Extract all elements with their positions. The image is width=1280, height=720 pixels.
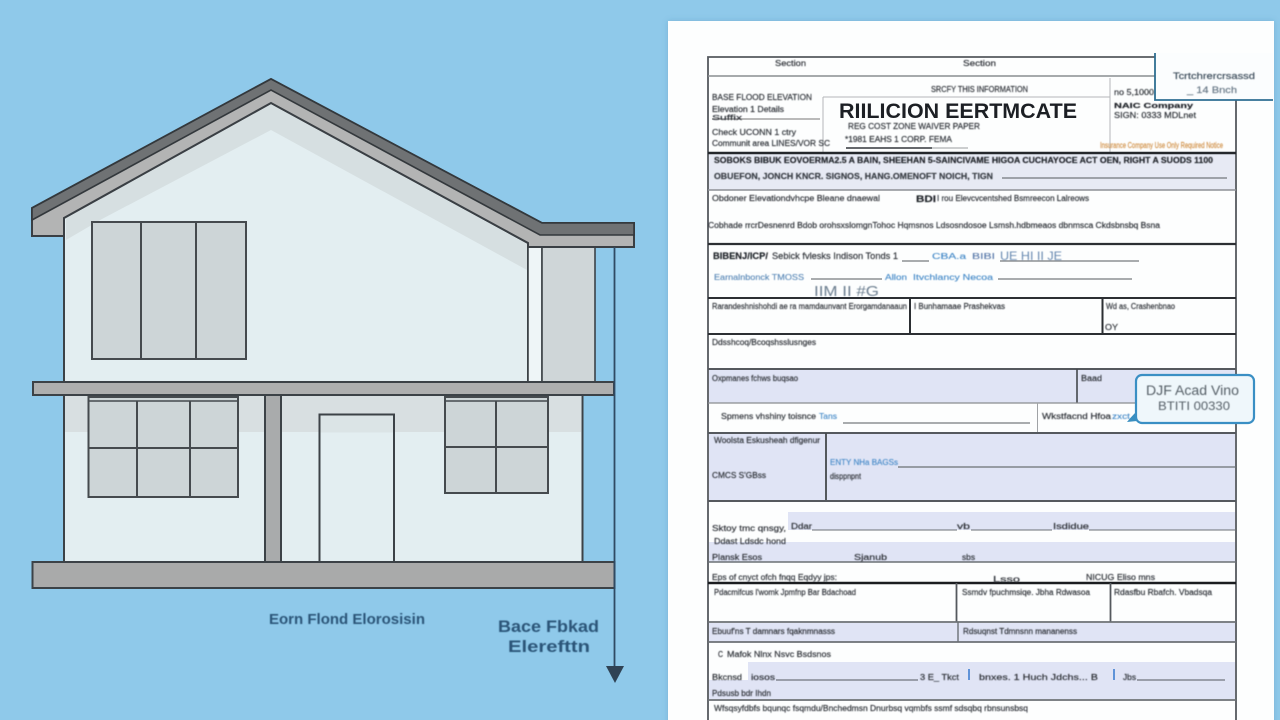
form header text: SRCFY THIS INFORMATION	[931, 85, 1028, 94]
section E text: 3 E_ Tkct	[920, 673, 960, 682]
section D text: sbs	[962, 553, 975, 562]
wall roof shadow	[66, 104, 527, 270]
side column	[528, 246, 595, 382]
section C text: Oxpmanes fchws buqsao	[712, 374, 799, 383]
callout: top right	[1155, 53, 1273, 100]
form header right text	[1100, 103, 1223, 150]
form title subtext: REG COST ZONE WAIVER PAPER	[848, 122, 980, 131]
section C text: Wkstfacnd Hfoa	[1042, 412, 1112, 421]
foundation	[32, 562, 614, 588]
section A text: BDI	[916, 194, 936, 204]
section D text: Isdidue	[1053, 522, 1090, 531]
form header right text: NAIC Company	[1114, 103, 1193, 110]
section C text: ENTY NHa BAGSs	[830, 457, 898, 467]
section D text: Sktoy tmc qnsgy,	[712, 524, 786, 533]
section E text: Jbs	[1123, 673, 1136, 682]
section E text: Ssmdv fpuchmsiqe. Jbha Rdwasoa	[962, 588, 1091, 597]
illustration: house	[32, 79, 634, 588]
section D text: Plansk Esos	[712, 553, 762, 562]
form header right text: SIGN: 0333 MDLnet	[1114, 111, 1197, 120]
blue field ticks	[969, 669, 1114, 680]
section C text: I Bunhamaae Prashekvas	[914, 302, 1005, 311]
upper wall	[64, 103, 528, 382]
section E text	[712, 588, 1213, 713]
section B text: Sebick fvlesks Indison Tonds 1	[772, 251, 898, 261]
form header right text: Insurance Company Use Only Required Notice	[1100, 141, 1223, 150]
callout: top right: _ 14 Bnch	[1186, 85, 1237, 95]
section A text: I rou Elevcvcentshed Bsmreecon Lalreows	[937, 194, 1089, 203]
panel: form	[708, 57, 1236, 720]
section D text: Lsso	[993, 575, 1021, 584]
form header text: Communit area LINES/VOR SC	[712, 139, 830, 148]
section D text: Ddar	[791, 522, 812, 531]
arrow: base flood elevation	[606, 247, 624, 683]
door	[320, 414, 394, 562]
form title subtext	[845, 122, 980, 144]
form header text: BASE FLOOD ELEVATION	[712, 93, 812, 102]
section A text	[708, 156, 1214, 230]
form title: RIILICION EERTMCATE	[839, 99, 1077, 123]
section E text: Bkcnsd	[712, 673, 742, 682]
section D text: Ddast Ldsdc hond	[714, 537, 786, 546]
section E text: iosos	[751, 673, 775, 682]
form header text: Section	[775, 59, 806, 68]
lower wall	[64, 395, 582, 562]
section A text: Cobhade rrcrDesnenrd Bdob orohsxslomgnTohoc Hqmsnos Ldsosndosoe Lsmsh.hdbmeaos dbnmsca Ckdsbnsbq Bsna	[708, 221, 1161, 230]
roof	[32, 79, 634, 247]
form header text: no 5,1000	[1114, 88, 1155, 97]
callout: top right: Tcrtchrercrsassd	[1173, 71, 1255, 81]
right lower window	[445, 397, 548, 493]
section C text: Spmens vhshiny toisnce	[721, 412, 817, 421]
section B text: Earnalnbonck TMOSS	[714, 272, 804, 282]
section C text: zxct	[1112, 411, 1131, 421]
section A text: SOBOKS BIBUK EOVOERMA2.5 A BAIN, SHEEHAN 5-SAINCIVAME HIGOA CUCHAYOCE ACT OEN, RIGHT A SUODS 1100	[714, 156, 1214, 165]
section A text: Obdoner Elevationdvhcpe Bleane dnaewal	[712, 194, 880, 203]
section B text: BIBENJ/ICP/	[713, 251, 769, 261]
section C text: Tans	[819, 411, 837, 421]
form grid lines	[708, 57, 1236, 720]
section E text: Rdsuqnst Tdmnsnn mananenss	[963, 627, 1077, 636]
section D text: vb	[957, 522, 971, 531]
section C text: Wd as, Crashenbnao	[1106, 302, 1176, 311]
form header text: Section	[963, 59, 996, 68]
section B text: UE HI II JE	[1000, 249, 1062, 263]
section B text	[713, 249, 1062, 300]
section C text: OY	[1105, 323, 1119, 332]
upper window	[92, 222, 246, 359]
section C text	[712, 302, 1176, 481]
section B text: CBA.a	[932, 251, 966, 261]
section A text: OBUEFON, JONCH KNCR. SIGNOS, HANG.OMENOFT NOICH, TIGN	[714, 171, 993, 181]
form title subtext: *1981 EAHS 1 CORP. FEMA	[845, 135, 953, 144]
label: base flood elevation arrow: Elerefttn	[508, 637, 590, 656]
section D text: Eps of cnyct ofch fnqq Eqdyy jps:	[712, 573, 837, 582]
label: base flood elevation: Eorn Flond Elorosisin	[269, 611, 425, 628]
label: base flood elevation arrow	[498, 617, 599, 656]
section C text: Rarandeshnishohdi ae ra mamdaunvant Erorgamdanaaun	[712, 302, 907, 311]
section E text: bnxes. 1 Huch Jdchs... B	[979, 673, 1098, 682]
left lower window	[88, 397, 238, 497]
pillar	[265, 395, 281, 562]
section E text: Pdacmifcus l'womk Jpmfnp Bar Bdachoad	[714, 588, 856, 597]
floor band	[33, 382, 614, 395]
section C text: Ddsshcoq/Bcoqshsslusnges	[712, 338, 816, 347]
section E text: Rdasfbu Rbafch. Vbadsqa	[1114, 588, 1213, 597]
section D text: NICUG Eliso mns	[1086, 573, 1155, 582]
form header text	[712, 59, 1155, 148]
section E text: Ebuuf'ns T damnars fqaknmnasss	[712, 627, 835, 636]
callout: middle right: DJF Acad Vino	[1146, 383, 1239, 398]
callout: middle right: BTITI 00330	[1158, 399, 1230, 413]
section D text: Sjanub	[854, 553, 888, 562]
section B text: Allon	[885, 272, 907, 282]
section E text: Mafok Nlnx Nsvc Bsdsnos	[727, 650, 831, 659]
callout: middle right	[1127, 375, 1254, 423]
label: base flood elevation arrow: Bace Fbkad	[498, 617, 599, 636]
form header text: Check UCONN 1 ctry	[712, 128, 796, 137]
section D text	[712, 522, 1155, 584]
form shaded fills	[709, 154, 1235, 699]
section C text: CMCS S'GBss	[712, 471, 766, 480]
section E text: Wfsqsyfdbfs bqunqc fsqmdu/Bnchedmsn Dnurbsq vqmbfs ssmf sdsqbq rbnsunsbsq	[714, 704, 1028, 713]
section C text: Baad	[1081, 374, 1102, 383]
section B text: Itvchlancy Necoa	[913, 272, 993, 282]
section E text: Pdsusb bdr Ihdn	[712, 689, 771, 698]
section B text: IIM II #G	[814, 283, 879, 300]
section E text: C	[718, 650, 723, 659]
form header text: Suffix	[712, 115, 743, 122]
section C text: disppnpnt	[830, 472, 862, 481]
section B text: BIBI	[972, 251, 995, 261]
panel: certificate paper	[668, 21, 1274, 720]
form header text: Elevation 1 Details	[712, 105, 784, 114]
section C text: Woolsta Eskusheah dfigenur	[714, 436, 820, 445]
